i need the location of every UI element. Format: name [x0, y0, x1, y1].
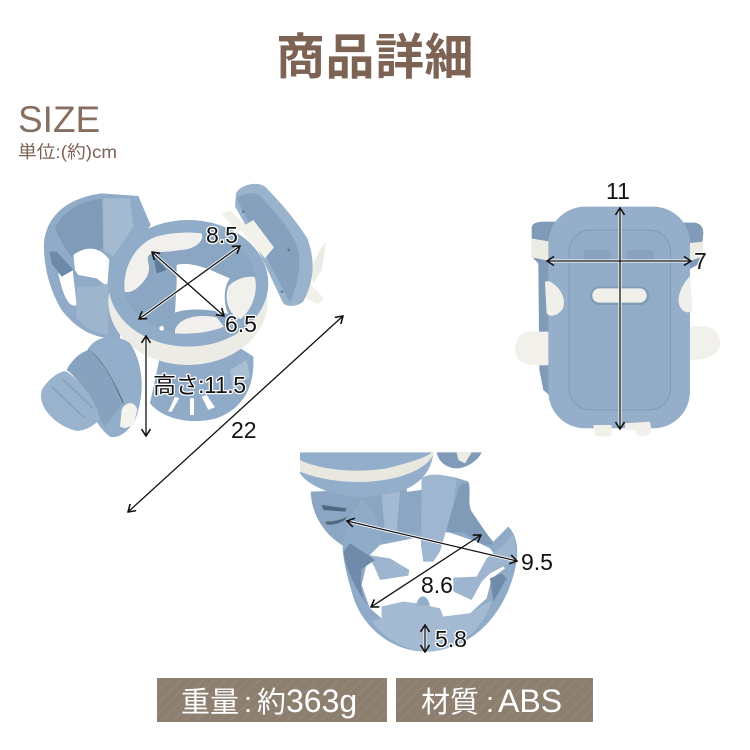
label: 22: 22	[231, 417, 257, 443]
spec box: weight	[157, 678, 387, 722]
label: 11: 11	[606, 178, 630, 204]
cup ring top	[300, 452, 433, 497]
label: 7: 7	[694, 248, 707, 274]
spec box: weight: 重量	[181, 686, 239, 719]
ring interior	[123, 232, 257, 334]
product photo: cup holder detail	[300, 452, 517, 652]
cup body	[343, 475, 517, 652]
back cup holder	[44, 193, 151, 338]
base disc	[311, 488, 410, 552]
arrow: cup height	[424, 625, 426, 652]
unit note: 単位:(約)cm	[18, 142, 117, 162]
tabs	[515, 327, 720, 365]
arrows: back view size	[547, 208, 691, 429]
top clamp	[437, 452, 482, 468]
far arm	[421, 475, 457, 562]
label: 8.5: 8.5	[206, 222, 238, 248]
label: height 11.5: 高さ:11.5	[153, 372, 246, 398]
arrow: height	[144, 336, 148, 436]
spec box: material: :	[486, 687, 494, 719]
white band behind	[531, 238, 703, 262]
handlebar clamp	[41, 337, 142, 437]
white band under ring	[108, 238, 268, 365]
label: 5.8: 5.8	[435, 626, 467, 652]
spec box: weight: :	[244, 687, 252, 719]
side grips	[545, 276, 693, 316]
spec box: weight: 363g	[286, 683, 357, 719]
bottom feet	[593, 422, 652, 437]
dimension arrows and labels	[128, 178, 707, 652]
product photo: back view	[515, 207, 720, 437]
spec box: material: 材質	[421, 686, 479, 719]
front wall	[372, 600, 492, 652]
arrow: cup outer width	[347, 521, 517, 561]
heading: SIZE: SIZE	[18, 99, 100, 140]
bottle ring	[108, 220, 268, 347]
label: 8.6: 8.6	[421, 572, 453, 598]
product photo: angled view	[41, 184, 326, 437]
label: 6.5: 6.5	[225, 311, 257, 337]
lower base disc	[150, 343, 253, 421]
spec box: weight: 約	[257, 686, 286, 719]
arrows: ring diameters	[139, 246, 240, 319]
plate	[548, 207, 690, 428]
suction mount plate	[222, 184, 326, 306]
center stem	[358, 488, 437, 542]
cup behind	[532, 222, 703, 410]
slot	[590, 287, 649, 305]
spec box: material	[396, 678, 593, 722]
spec box: material: ABS	[498, 683, 562, 719]
window recesses	[583, 250, 654, 262]
label: 9.5: 9.5	[521, 549, 553, 575]
cup opening	[362, 532, 505, 618]
right tab	[453, 533, 517, 600]
left tab	[368, 555, 409, 580]
arrow: overall length 22	[128, 316, 343, 512]
arrow: cup inner width	[371, 535, 481, 607]
title: 商品詳細	[276, 31, 474, 85]
